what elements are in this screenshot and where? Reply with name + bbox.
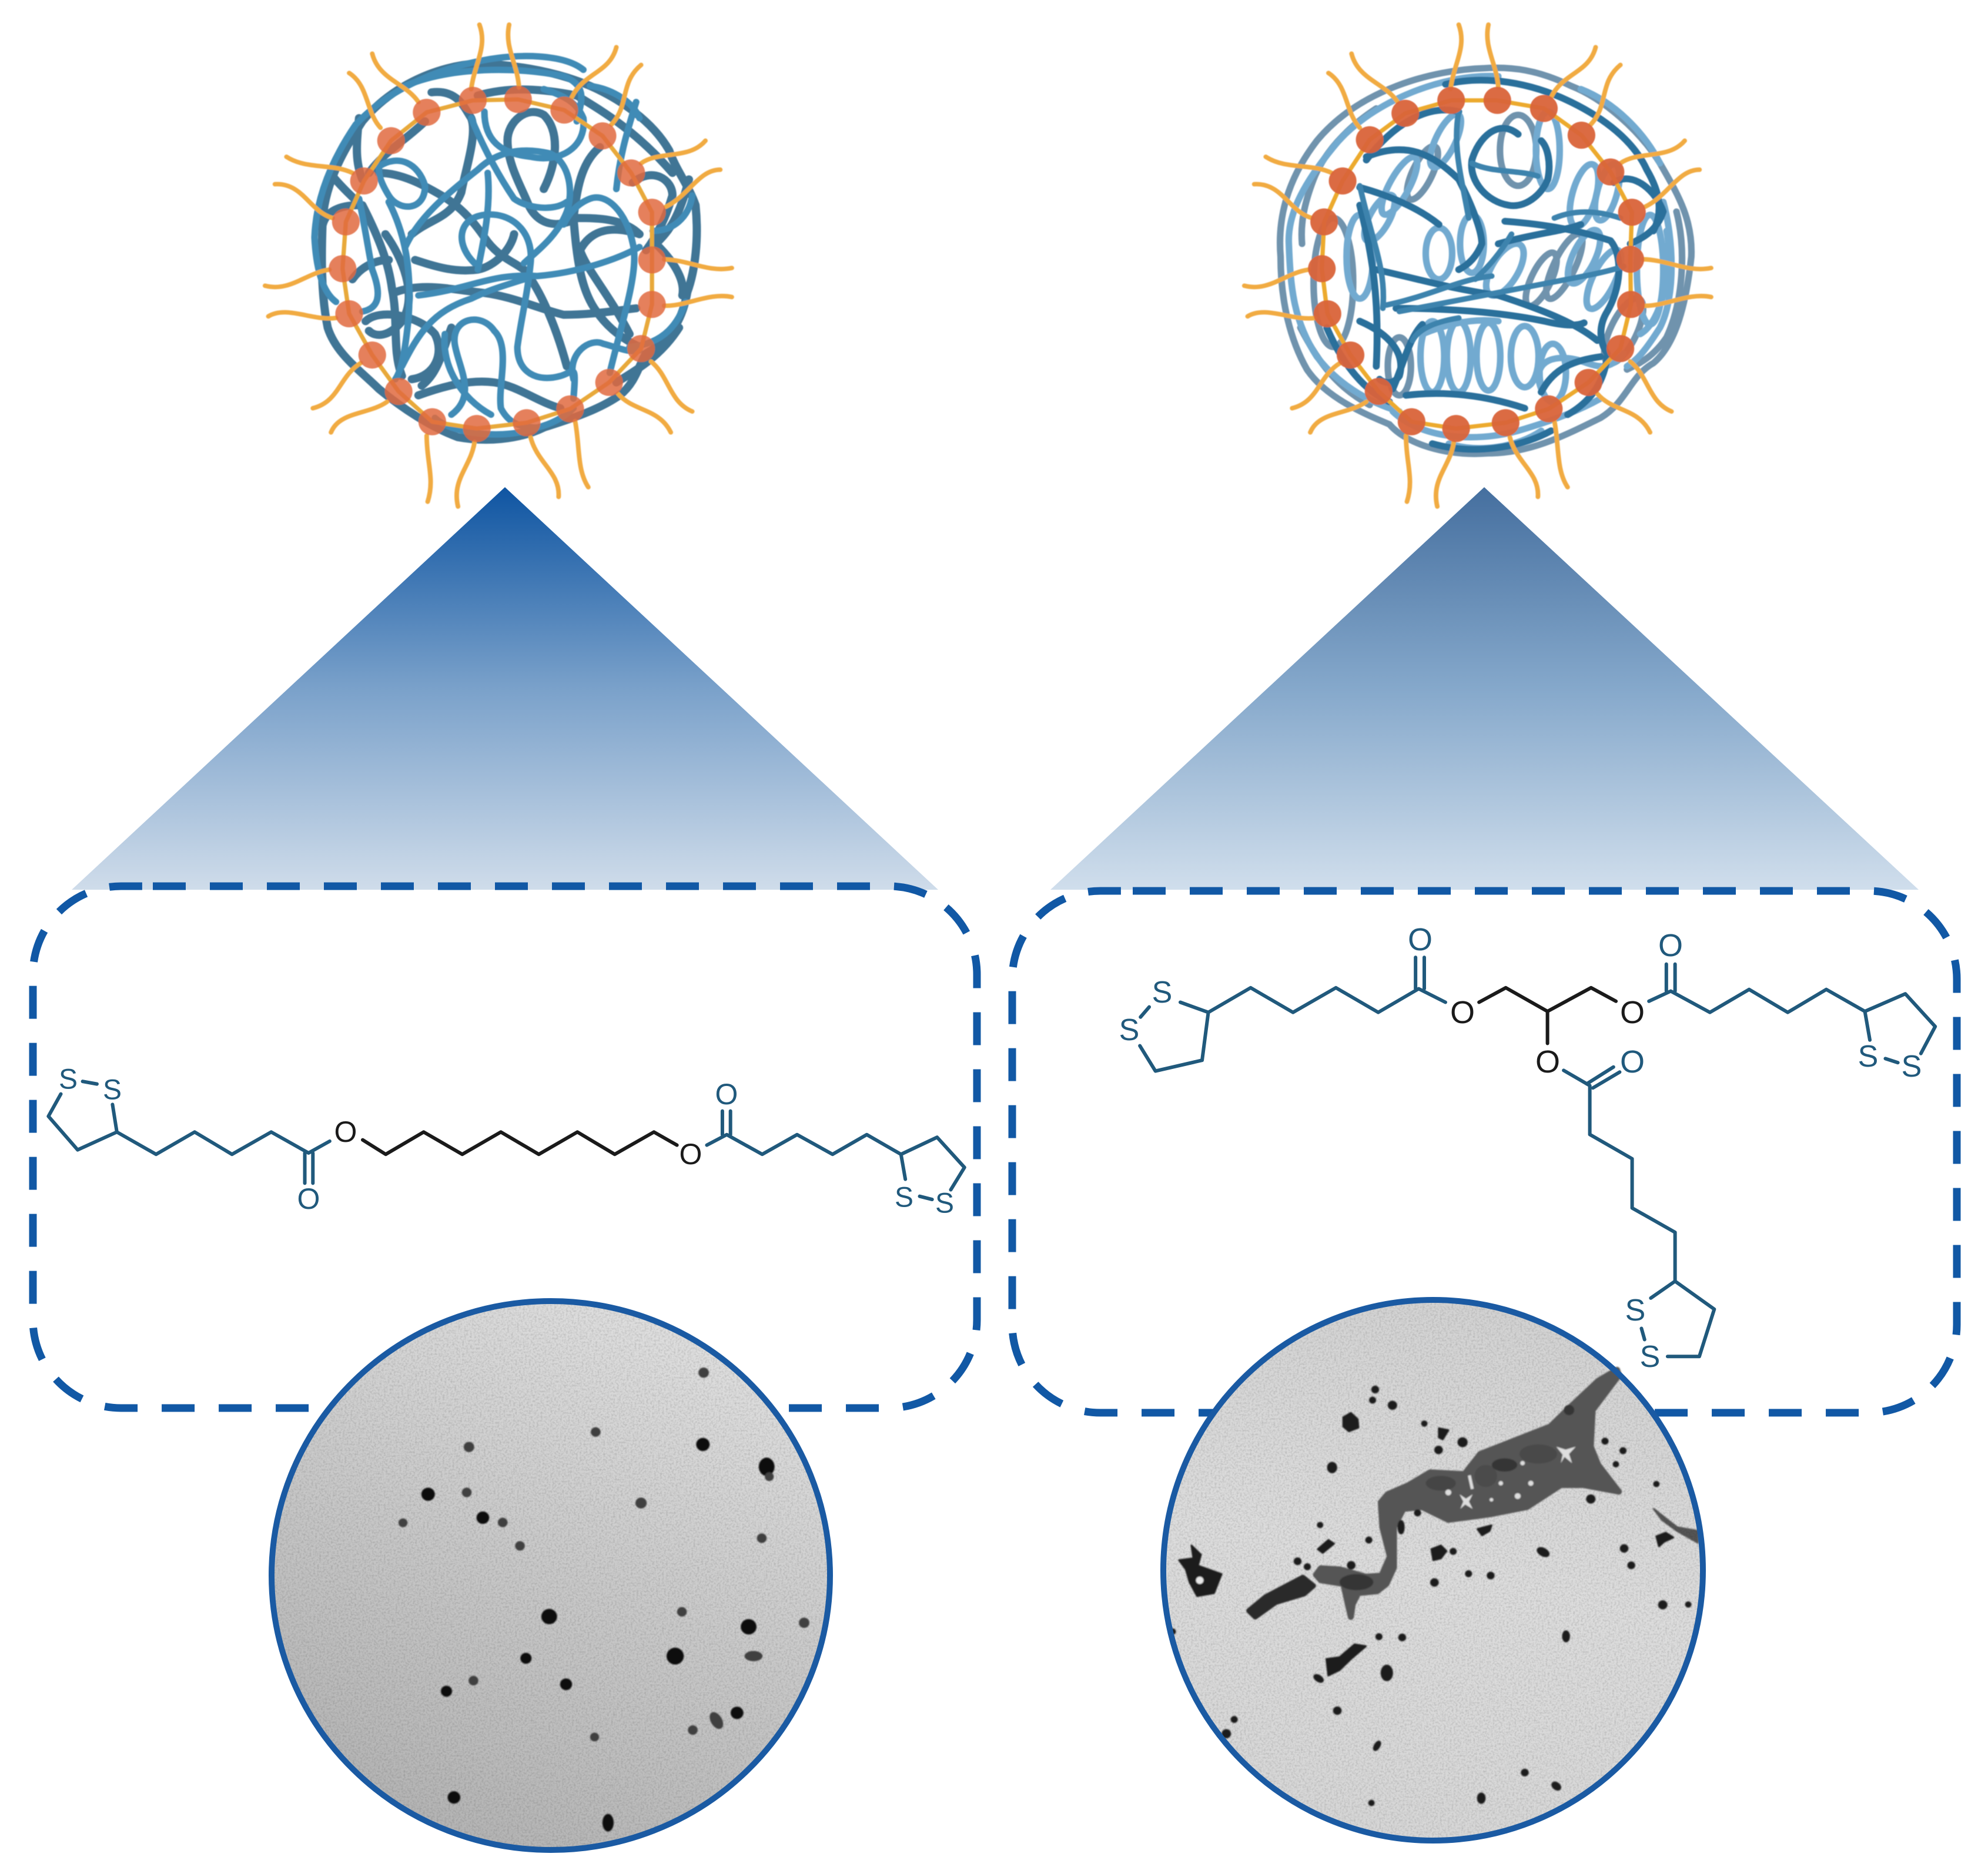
dashed panel: right molecule bbox=[1012, 891, 1957, 1413]
lipid shell and tails bbox=[1244, 25, 1711, 507]
lipid head beads bbox=[1308, 87, 1646, 442]
nanoparticle: left, dense polymer core with lipid shell bbox=[265, 25, 732, 507]
lipid tails bbox=[1244, 25, 1711, 507]
right micrograph grain bbox=[1163, 1300, 1703, 1841]
dashed panel: left molecule bbox=[33, 886, 977, 1408]
polymer strands: dark bbox=[322, 63, 697, 440]
lipid shell ring bbox=[1322, 100, 1632, 428]
right molecule atom labels: S bbox=[1625, 1293, 1645, 1328]
molecule: right tris-lipoate on glycerol bbox=[1119, 922, 1935, 1374]
scattered clusters bbox=[1170, 1387, 1698, 1805]
voids in aggregate bbox=[1445, 1447, 1576, 1509]
right micrograph aggregates bbox=[1170, 1370, 1698, 1805]
right molecule atom labels: O bbox=[1408, 922, 1433, 957]
triangle: left zoom connector bbox=[72, 487, 938, 890]
left micrograph ring bbox=[272, 1301, 830, 1850]
left molecule atom labels: O bbox=[334, 1115, 357, 1148]
molecule: left bis-lipoate with octane linker bbox=[48, 1064, 965, 1219]
TEM micrograph: left, dispersed particles bbox=[272, 1301, 830, 1850]
left molecule atom labels: O bbox=[297, 1182, 320, 1215]
left molecule atom labels: S bbox=[935, 1188, 954, 1219]
ghost strands: grey blue bbox=[1280, 68, 1691, 454]
left micrograph background bbox=[272, 1301, 830, 1850]
TEM micrograph: right, aggregated particles bbox=[1163, 1300, 1703, 1841]
right molecule atom labels bbox=[1119, 922, 1922, 1374]
left micrograph particles bbox=[399, 1367, 809, 1832]
lipid tails bbox=[265, 25, 732, 507]
right molecule atom labels: O bbox=[1620, 995, 1645, 1030]
lipid shell ring bbox=[343, 99, 652, 428]
right molecule atom labels: O bbox=[1535, 1044, 1560, 1080]
ghost strands: light blue bbox=[1288, 76, 1672, 448]
hole in left cluster bbox=[1196, 1577, 1203, 1584]
right molecule atom labels: S bbox=[1152, 976, 1172, 1010]
left molecule atom labels: S bbox=[103, 1074, 122, 1106]
right molecule atom labels: S bbox=[1858, 1040, 1878, 1074]
left molecule atom labels bbox=[59, 1064, 954, 1219]
left molecule atom labels: O bbox=[715, 1078, 738, 1111]
nanoparticle: right, crosslinked polymer core with lipid shell bbox=[1244, 25, 1711, 507]
right molecule atom labels: S bbox=[1640, 1340, 1660, 1374]
right molecule atom labels: S bbox=[1119, 1013, 1139, 1047]
polymer strands: light bbox=[314, 56, 692, 434]
lipid head beads bbox=[329, 86, 666, 442]
right molecule atom labels: O bbox=[1658, 928, 1683, 963]
dense patches bbox=[1340, 1405, 1574, 1590]
right molecule atom labels: O bbox=[1450, 995, 1475, 1030]
triangle: right zoom connector bbox=[1050, 487, 1919, 890]
right molecule bonds bbox=[1140, 957, 1935, 1356]
left molecule atom labels: S bbox=[895, 1182, 913, 1213]
mid-blue strands bbox=[1360, 112, 1624, 340]
main aggregate band bbox=[1316, 1370, 1619, 1617]
right molecule atom labels: S bbox=[1902, 1050, 1922, 1084]
right micrograph ring bbox=[1163, 1300, 1703, 1841]
left molecule atom labels: S bbox=[59, 1064, 78, 1095]
main strands: deep blue bbox=[1327, 80, 1664, 450]
darker aggregate tail bbox=[1249, 1577, 1313, 1617]
left molecule bonds bbox=[48, 1081, 965, 1199]
left micrograph grain bbox=[272, 1301, 830, 1850]
left molecule atom labels: O bbox=[680, 1138, 702, 1171]
right molecule atom labels: O bbox=[1620, 1044, 1645, 1080]
right micrograph background bbox=[1163, 1300, 1703, 1841]
